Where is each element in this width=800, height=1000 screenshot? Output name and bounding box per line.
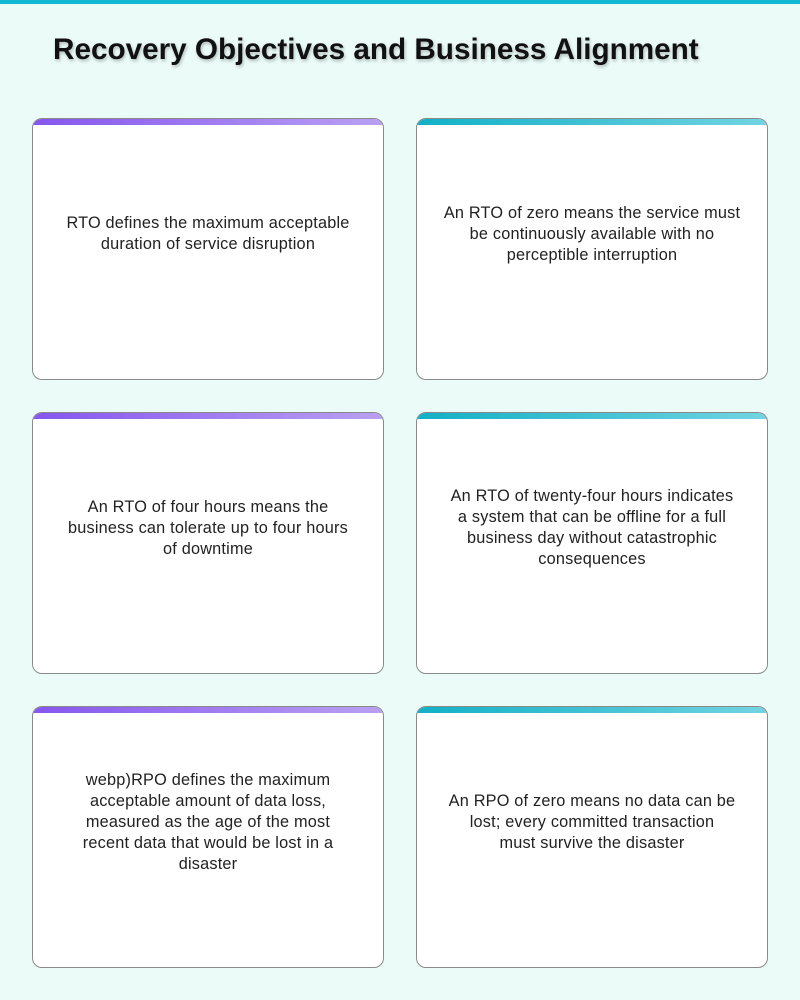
panel: RPO definition: acceptable amount of data loss, (90, 792, 326, 810)
panel: RTO twenty-four hours (416, 412, 768, 674)
panel: RPO definition: measured as the age of the most (86, 812, 330, 830)
panel: RTO zero (416, 118, 768, 380)
panel: RTO definition: duration of service disruption (101, 235, 315, 253)
panel: RTO four hours: of downtime (163, 540, 253, 558)
panel: RPO definition (32, 706, 384, 968)
panel: RTO four hours: An RTO of four hours means the (88, 498, 328, 516)
panel: RPO zero: must survive the disaster (499, 834, 685, 852)
panel: RTO zero: An RTO of zero means the service must (444, 204, 740, 222)
panel: RTO twenty-four hours: business day without catastrophic (467, 529, 717, 547)
panel: RTO twenty-four hours: consequences (538, 550, 646, 568)
panel: RPO definition: disaster (179, 854, 237, 872)
panel: RTO zero: be continuously available with no (470, 224, 714, 242)
panel: RTO definition (32, 118, 384, 380)
panel: RTO four hours: business can tolerate up to four hours (68, 518, 348, 536)
panel: RTO definition: RTO defines the maximum acceptable (66, 214, 350, 232)
panel: RPO zero (416, 706, 768, 968)
panel: RPO definition: recent data that would be lost in a (83, 834, 333, 852)
panel: RTO zero: perceptible interruption (507, 246, 677, 264)
panel: RTO twenty-four hours: a system that can be offline for a full (458, 508, 726, 526)
panel: RPO zero: An RPO of zero means no data can be (449, 792, 735, 810)
panel: RTO four hours (32, 412, 384, 674)
panel: RTO twenty-four hours: An RTO of twenty-four hours indicates (451, 487, 733, 505)
title: Recovery Objectives and Business Alignment (53, 33, 699, 66)
panel: RPO zero: lost; every committed transaction (470, 812, 714, 830)
panel: RPO definition: webp)RPO defines the maximum (86, 770, 330, 788)
